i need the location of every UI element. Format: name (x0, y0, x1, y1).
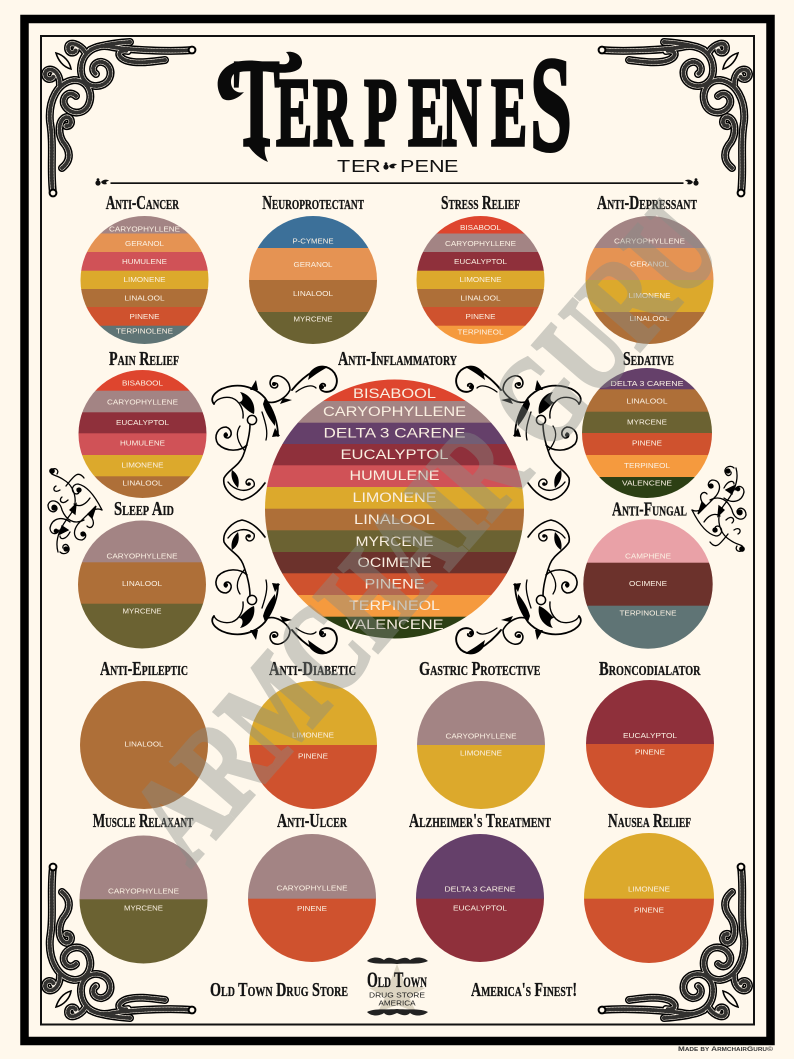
chart circle: MYRCENE (627, 419, 667, 426)
chart circle: CARYOPHYLLENE (614, 239, 685, 246)
chart circle: EUCALYPTOL (623, 733, 677, 740)
logo star backdrop (369, 964, 425, 1012)
chart circle: CARYOPHYLLENE (107, 399, 178, 406)
chart circle: HUMULENE (350, 468, 440, 483)
chart circle: LIMONENE (628, 886, 670, 893)
corner ornament bottom right (599, 864, 749, 1018)
panel: Sleep Aid (77, 498, 207, 649)
chart circle: OCIMENE (629, 581, 667, 588)
chart circle: BISABOOL (122, 381, 163, 388)
divider rule (110, 182, 684, 184)
chart circle: LIMONENE (460, 277, 502, 284)
panel: Anti-Ulcer (247, 810, 377, 964)
chart circle: LINALOOL (122, 481, 163, 488)
heading: Gastric Protective (419, 658, 540, 680)
corner ornament top right (599, 42, 749, 196)
chart circle (77, 520, 207, 649)
chart circle: CARYOPHYLLENE (446, 734, 517, 741)
heading: Nausea Relief (608, 810, 691, 832)
chart circle: EUCALYPTOL (454, 259, 507, 266)
chart circle: MYRCENE (294, 317, 333, 324)
chart circle: CARYOPHYLLENE (323, 404, 466, 419)
logo wordmark: Old Town (367, 967, 427, 992)
panel: Stress Relief (416, 192, 546, 345)
chart circle: CARYOPHYLLENE (445, 241, 516, 248)
chart circle: TERPINEOL (349, 598, 440, 613)
chart circle: MYRCENE (122, 609, 162, 616)
chart circle: PINENE (635, 750, 665, 757)
logo tagline: DRUG STORE (369, 990, 425, 1000)
chart circle: PINENE (632, 441, 662, 448)
chart circle: BISABOOL (460, 225, 501, 232)
side filigree right (692, 466, 746, 551)
panel: Muscle Relaxant (79, 810, 209, 964)
chart circle: PINENE (364, 576, 425, 591)
panel: Gastric Protective (416, 658, 546, 810)
chart circle: LINALOOL (354, 512, 435, 527)
chart circle (581, 368, 713, 498)
chart circle (80, 216, 210, 345)
panel: Anti-Depressant (585, 192, 715, 344)
chart circle: CARYOPHYLLENE (276, 886, 348, 893)
chart circle: TERPINOLENE (116, 329, 173, 336)
footer text left: Old Town Drug Store (210, 979, 348, 1001)
heading: Anti-Inflammatory (338, 348, 457, 370)
chart circle: EUCALYPTOL (116, 420, 169, 427)
heading: Anti-Epileptic (100, 658, 188, 680)
heading: Broncodialator (599, 658, 701, 680)
panel: Alzheimer's Treatment (409, 810, 551, 964)
chart circle: LINALOOL (293, 291, 333, 298)
logo tagline second line: AMERICA (378, 998, 416, 1008)
chart circle: DELTA 3 CARENE (610, 381, 684, 388)
chart circle: PINENE (130, 314, 160, 321)
title: S (530, 29, 572, 180)
subtitle ornament (383, 162, 397, 170)
chart circle (249, 216, 379, 344)
panel: Anti-Fungal (583, 498, 714, 650)
chart circle (247, 833, 377, 964)
panel: Anti-Inflammatory (264, 348, 526, 640)
flourish top left (212, 366, 337, 500)
chart circle: CARYOPHYLLENE (109, 227, 180, 234)
chart circle: LIMONENE (628, 293, 671, 300)
chart circle: HUMULENE (120, 441, 165, 448)
heading: Anti-Fungal (612, 498, 687, 520)
chart circle: GERANOL (630, 262, 669, 269)
chart circle (264, 379, 526, 640)
chart circle: DELTA 3 CARENE (324, 425, 466, 440)
chart circle: DELTA 3 CARENE (444, 886, 516, 893)
chart circle (248, 680, 378, 810)
panel: Anti-Epileptic (79, 658, 209, 810)
chart circle (78, 370, 208, 498)
divider ornament right (685, 178, 699, 186)
chart circle: PINENE (466, 314, 496, 321)
chart circle: P-CYMENE (292, 239, 334, 246)
subtitle: TERPENE (337, 157, 458, 177)
heading: Sleep Aid (114, 498, 174, 520)
chart circle: LINALOOL (124, 741, 164, 748)
chart circle: PINENE (297, 906, 327, 913)
heading: Stress Relief (441, 192, 520, 214)
panel: Sedative (581, 348, 713, 498)
panel: Anti-Diabetic (248, 658, 378, 810)
flourish bottom right (456, 520, 581, 654)
chart circle: LINALOOL (630, 316, 670, 323)
heading: Muscle Relaxant (93, 810, 194, 832)
chart circle: GERANOL (294, 262, 333, 269)
chart circle: LINALOOL (122, 581, 162, 588)
heading: Alzheimer's Treatment (409, 810, 551, 832)
chart circle: EUCALYPTOL (340, 447, 448, 462)
flourish bottom left (212, 520, 337, 654)
chart circle: LIMONENE (460, 751, 502, 758)
chart circle: BISABOOL (353, 386, 436, 401)
flourish top right (456, 366, 581, 500)
heading: Anti-Ulcer (277, 810, 348, 832)
chart circle: CARYOPHYLLENE (106, 553, 178, 560)
logo top ornament (367, 958, 428, 964)
heading: Anti-Cancer (106, 192, 180, 214)
chart circle: CAMPHENE (625, 553, 671, 560)
divider ornament left (95, 178, 109, 186)
credit: Made by ArmchairGuru© (678, 1045, 773, 1053)
chart circle: LIMONENE (124, 277, 166, 284)
panel: Broncodialator (585, 658, 715, 809)
side filigree left (48, 469, 102, 554)
chart circle: VALENCENE (346, 617, 444, 632)
chart circle: PINENE (298, 754, 328, 761)
chart circle: LINALOOL (626, 398, 668, 405)
title: TERPENE (234, 33, 527, 172)
heading: Anti-Depressant (597, 192, 697, 214)
logo: Old Town Drug Store America (367, 958, 428, 1016)
panel: Anti-Cancer (80, 192, 210, 345)
heading: Neuroprotectant (262, 192, 364, 214)
chart circle: VALENCENE (622, 480, 672, 487)
chart circle: LINALOOL (460, 296, 501, 303)
chart circle: LIMONENE (292, 733, 334, 740)
footer text right: America's Finest! (471, 979, 577, 1001)
logo bottom ornament (367, 1009, 428, 1016)
chart circle (79, 680, 209, 810)
chart circle (416, 680, 546, 810)
chart circle: LINALOOL (124, 296, 165, 303)
panel: Nausea Relief (584, 810, 714, 964)
heading: Pain Relief (109, 348, 179, 370)
chart circle: PINENE (634, 907, 664, 914)
panel: Pain Relief (78, 348, 208, 498)
chart circle (585, 679, 715, 809)
corner ornament bottom left (45, 864, 195, 1018)
chart circle: LIMONENE (122, 463, 164, 470)
corner ornament top left (45, 42, 195, 196)
chart circle: HUMULENE (122, 259, 167, 266)
chart circle: EUCALYPTOL (453, 906, 507, 913)
heading: Sedative (623, 348, 674, 370)
chart circle (79, 835, 209, 964)
chart circle (584, 833, 714, 964)
chart circle (415, 833, 545, 964)
chart circle: OCIMENE (358, 555, 432, 570)
chart circle (585, 216, 715, 344)
chart circle: GERANOL (125, 241, 164, 248)
chart circle: MYRCENE (356, 534, 434, 549)
panel: Neuroprotectant (249, 192, 379, 344)
chart circle: TERPINEOL (458, 330, 504, 337)
chart circle: LIMONENE (352, 490, 437, 505)
chart circle: TERPINEOL (624, 463, 670, 470)
heading: Anti-Diabetic (269, 658, 356, 680)
chart circle: CARYOPHYLLENE (108, 888, 179, 895)
chart circle (416, 216, 546, 345)
chart circle: TERPINOLENE (620, 610, 677, 617)
chart circle (583, 519, 714, 650)
chart circle: MYRCENE (124, 905, 163, 912)
